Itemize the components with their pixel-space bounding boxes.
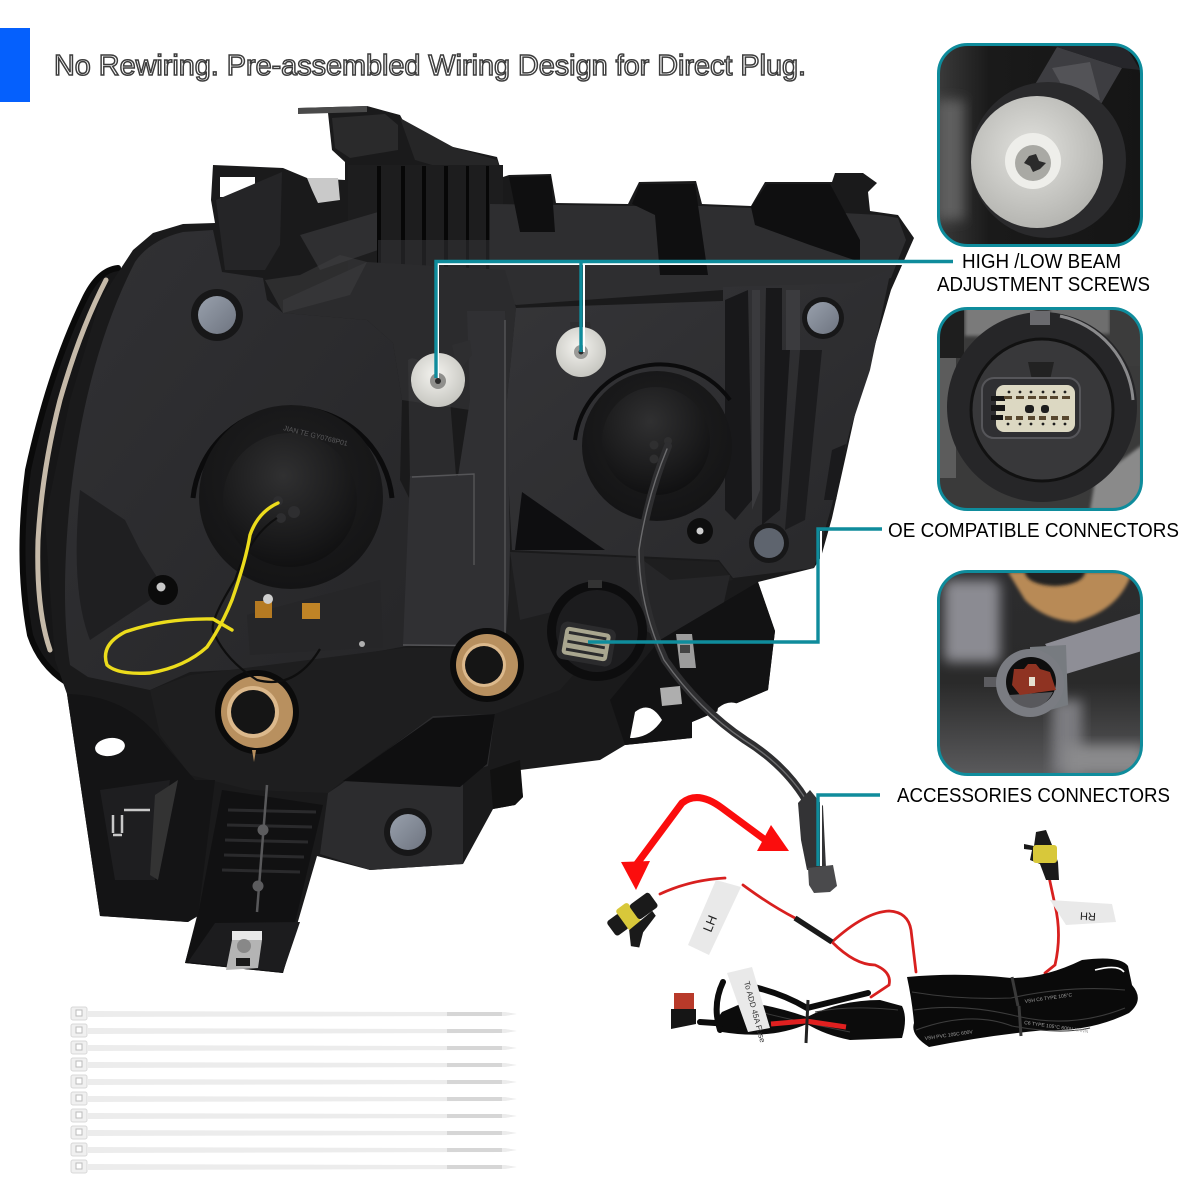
label: high low beam screws: ADJUSTMENT SCREWS [937, 274, 1150, 296]
dark wedge under right dome [515, 492, 605, 550]
left dome: JIAN TE GY0768P01 [283, 425, 348, 448]
bracket recess [100, 780, 178, 880]
label: high low beam screws [937, 251, 1150, 296]
right dome [575, 364, 732, 521]
RH connector [1024, 830, 1059, 880]
left housing panel [65, 230, 412, 690]
callout lines: adjustment screws [436, 262, 955, 378]
bracket tab [1036, 47, 1122, 104]
cable tie 10 [71, 1160, 517, 1173]
red sleeve [771, 1021, 846, 1027]
mounting tab [298, 106, 367, 114]
pins [1004, 396, 1070, 420]
right coil: C6 TYPE 105°C 600V XHNN [1024, 1020, 1089, 1035]
deck notches [509, 176, 860, 275]
vent plug upper left [191, 289, 243, 341]
OE socket [547, 580, 647, 681]
panel: OE connector closeup [936, 306, 1145, 510]
cable tie 4 [71, 1058, 517, 1071]
left dome [193, 405, 392, 589]
red contact block [1012, 664, 1056, 695]
black splice [795, 918, 832, 942]
bracket slot [94, 736, 126, 758]
top shoulder [400, 118, 503, 178]
label: high low beam screws: HIGH /LOW BEAM [962, 251, 1121, 273]
wiring harness [604, 830, 1138, 1047]
red branch wires [660, 877, 1058, 997]
column highlights [403, 320, 505, 646]
adjuster screw right [556, 322, 606, 377]
label: accessories connectors: ACCESSORIES CONNECTORS [897, 785, 1170, 807]
area between panel and column [283, 262, 516, 420]
panel: adjustment screw closeup [936, 44, 1142, 246]
cable ties [71, 1007, 517, 1173]
left cavities [991, 396, 1005, 420]
panel: accessories connector closeup [938, 558, 1145, 775]
cable tie 9 [71, 1143, 517, 1156]
back disc [970, 82, 1126, 238]
cable tie 1 [71, 1007, 517, 1020]
central housing block [505, 269, 891, 578]
left coil [700, 982, 905, 1040]
notch by right edge [824, 444, 846, 500]
small post under block [490, 760, 523, 809]
blurred tan socket [1008, 572, 1132, 622]
cable tie 2 [71, 1024, 517, 1037]
adjuster screw left [411, 340, 472, 407]
black wire left [213, 518, 320, 682]
bottom silver clip [226, 931, 262, 970]
vent plug lower right [749, 523, 789, 563]
LH label: LH [700, 913, 720, 934]
column left shadow [408, 358, 456, 478]
top mount post [332, 114, 398, 158]
wire sleeve [1045, 612, 1145, 674]
latch [1028, 362, 1054, 377]
blue accent bar [0, 28, 30, 102]
upper deck band [490, 204, 906, 305]
connector face [996, 385, 1075, 432]
left panel facet [77, 490, 165, 640]
coil tie [806, 1000, 808, 1043]
cable tie 8 [71, 1126, 517, 1139]
small socket right [687, 518, 713, 544]
label: OE compatible connectors: OE COMPATIBLE CONNECTORS [888, 520, 1179, 542]
cable tie 3 [71, 1041, 517, 1054]
right coil [907, 958, 1138, 1047]
finned bracket [185, 785, 323, 973]
blurred light strip [936, 100, 964, 220]
plug bore [1006, 657, 1056, 707]
block dark wedge [343, 714, 495, 787]
bottom center block [320, 714, 495, 870]
harness pigtail [639, 446, 806, 800]
lower right bracket [610, 582, 775, 745]
RH label: RH [1080, 909, 1096, 922]
title: No Rewiring. Pre-assembled Wiring Design for Direct Plug. [54, 50, 806, 82]
right coil: VSH C6 TYPE 105°C [1024, 992, 1073, 1005]
cable tie 7 [71, 1109, 517, 1122]
vent plug bottom [384, 808, 432, 856]
blurred lower mid strip [1052, 700, 1082, 775]
top tab [1030, 311, 1050, 325]
lens rim [22, 268, 130, 682]
inner disc [971, 339, 1113, 481]
vertical ribs [725, 288, 822, 530]
LH label [688, 880, 741, 955]
small socket left [148, 575, 178, 605]
harness sleeve and plug [798, 790, 837, 893]
vent plug upper right [802, 297, 844, 339]
fuse label [727, 967, 770, 1044]
fuse [671, 993, 696, 1029]
connector ring [947, 312, 1137, 502]
background shapes [965, 306, 1035, 336]
knurled knob [971, 96, 1103, 228]
callout lines: accessories connectors [818, 795, 880, 866]
headlight assembly, rear view [22, 106, 914, 973]
cable tie 6 [71, 1092, 517, 1105]
blurred grey bracket [944, 580, 1000, 662]
wire module box [247, 580, 383, 655]
housing silhouette [45, 106, 914, 973]
LH connector [604, 888, 672, 955]
red double arrow [621, 798, 789, 890]
brown socket left [215, 670, 299, 762]
callout lines: OE connectors [588, 529, 882, 645]
RH label [1050, 900, 1116, 925]
screw washer [1005, 133, 1061, 189]
vertical column [403, 311, 510, 645]
upper left bracket leg [216, 172, 282, 270]
yellow wire [105, 503, 278, 673]
torx recess [1024, 154, 1046, 172]
ribbed top section [300, 165, 506, 270]
fuse label: To ADD 45A Fuse [742, 980, 767, 1044]
right coil: VSH PVC 105C 600V [924, 1029, 974, 1042]
connector shell [982, 378, 1080, 438]
lower center connector deck [510, 552, 730, 640]
brown socket right [450, 628, 524, 702]
lower base [150, 552, 733, 793]
raised panel ridge [265, 255, 367, 313]
bottom left bracket [67, 694, 215, 922]
plug shell [1030, 645, 1068, 710]
bracket window [220, 177, 255, 197]
cable tie 5 [71, 1075, 517, 1088]
silver clip [307, 178, 340, 203]
